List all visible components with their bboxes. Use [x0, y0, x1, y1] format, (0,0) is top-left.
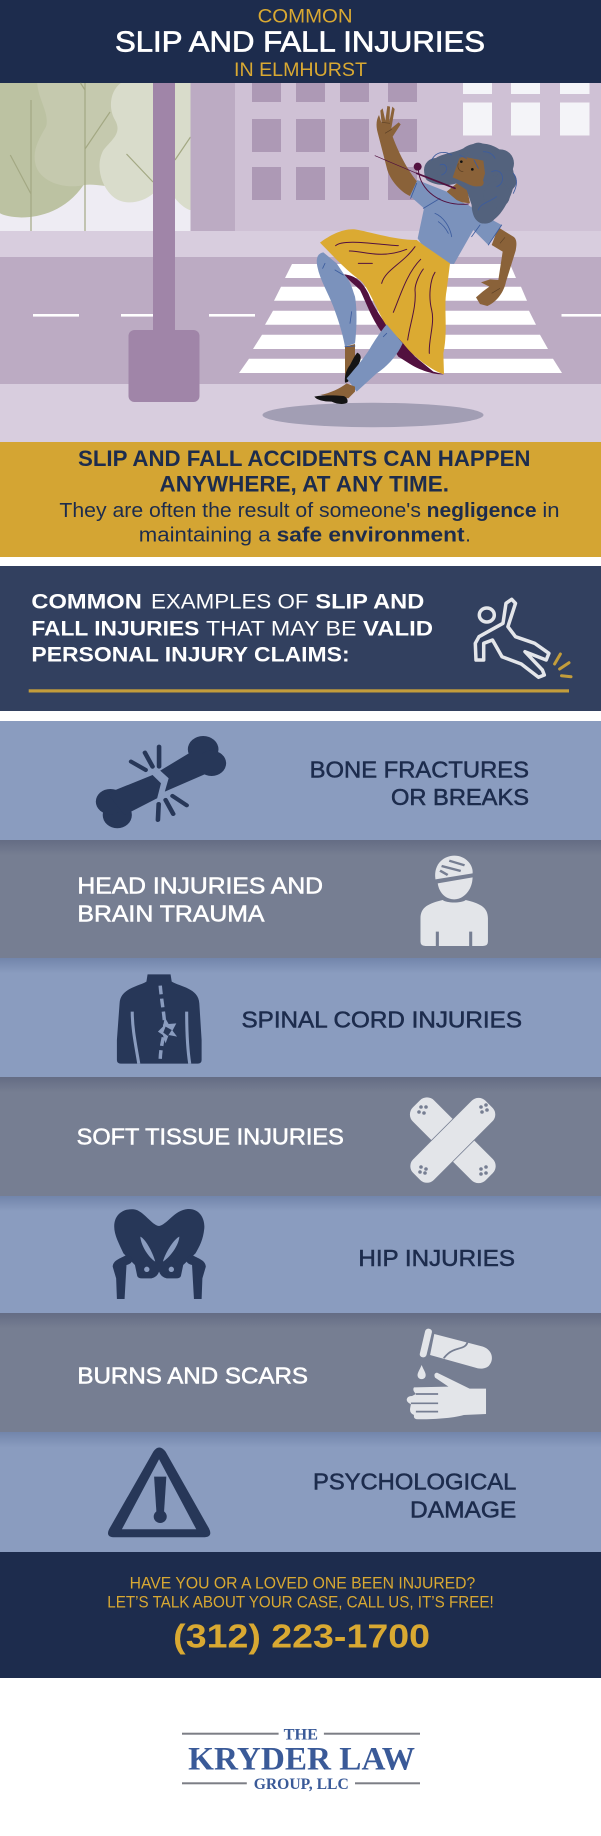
- panel heading: COMMON: [31, 590, 142, 614]
- intro text: maintaining a: [139, 525, 272, 547]
- label: [77, 872, 323, 927]
- label: BURNS AND SCARS: [77, 1362, 308, 1388]
- intro text: negligence: [427, 500, 537, 522]
- row: burns and scars: [0, 1313, 601, 1432]
- label: PSYCHOLOGICAL: [313, 1468, 516, 1494]
- shadow: [262, 403, 484, 427]
- label: [310, 757, 529, 810]
- label: [313, 1468, 516, 1523]
- cta text: [107, 1574, 494, 1612]
- icon: pelvis: [113, 1209, 206, 1299]
- logo: the kryder law group: KRYDER LAW: [188, 1741, 415, 1777]
- header banner: [0, 0, 601, 83]
- logo: the kryder law group: [182, 1726, 420, 1793]
- panel heading: VALID: [363, 616, 433, 640]
- panel heading: SLIP AND: [315, 590, 424, 614]
- label: BRAIN TRAUMA: [77, 901, 265, 927]
- gold intro panel: [0, 442, 601, 557]
- icon: bandaged head: [420, 856, 488, 946]
- panel heading: [31, 590, 433, 667]
- row: head injuries: [0, 840, 601, 958]
- title: slip and fall injuries: SLIP AND FALL INJURIES: [115, 26, 485, 58]
- row: spinal cord injuries: [0, 958, 601, 1077]
- intro text: [59, 500, 560, 547]
- row: soft tissue injuries: [0, 1077, 601, 1196]
- title: in elmhurst: IN ELMHURST: [234, 59, 367, 81]
- intro text: .: [465, 525, 471, 547]
- label: BONE FRACTURES: [310, 757, 529, 783]
- label: HEAD INJURIES AND: [77, 872, 323, 898]
- lamp post: [128, 83, 200, 402]
- call to action footer: [0, 1552, 601, 1678]
- cta text: HAVE YOU OR A LOVED ONE BEEN INJURED?: [130, 1574, 475, 1593]
- panel heading: PERSONAL INJURY CLAIMS:: [31, 643, 350, 667]
- icon: chemical burn on hand: [407, 1332, 492, 1419]
- falling woman: [314, 106, 517, 404]
- building: [190, 83, 601, 231]
- logo: the kryder law group: THE: [284, 1726, 318, 1743]
- label: DAMAGE: [410, 1497, 516, 1523]
- navy examples panel: [0, 566, 601, 711]
- row: hip injuries: [0, 1196, 601, 1313]
- logo: the kryder law group: GROUP, LLC: [254, 1776, 349, 1793]
- trees: [0, 83, 191, 217]
- hero illustration: street scene: [0, 83, 601, 442]
- icon: warning triangle: [108, 1447, 210, 1537]
- intro text: They are often the result of someone's: [59, 500, 421, 522]
- intro heading: [78, 446, 530, 497]
- icon: falling person: [475, 599, 571, 677]
- intro text: safe environment: [277, 525, 465, 547]
- phone number: (312) 223-1700: [173, 1617, 430, 1654]
- label: HIP INJURIES: [358, 1245, 515, 1271]
- label: SPINAL CORD INJURIES: [242, 1007, 522, 1033]
- icon: broken bone: [96, 736, 226, 828]
- crosswalk: [239, 264, 562, 373]
- sky: [0, 83, 191, 231]
- row: psychological damage: [0, 1432, 601, 1552]
- label: OR BREAKS: [391, 784, 529, 810]
- intro text: in: [542, 500, 560, 522]
- label: SOFT TISSUE INJURIES: [77, 1123, 344, 1149]
- title: common: COMMON: [258, 6, 353, 28]
- panel heading: THAT MAY BE: [206, 616, 356, 640]
- row: bone fractures: [0, 721, 601, 840]
- panel heading: FALL INJURIES: [31, 616, 199, 640]
- road: [0, 231, 601, 384]
- cta text: LET’S TALK ABOUT YOUR CASE, CALL US, IT’S FREE!: [107, 1593, 494, 1612]
- icon: crossed bandages: [406, 1093, 500, 1187]
- icon: injured spine: [117, 974, 202, 1064]
- panel heading: EXAMPLES OF: [151, 590, 308, 614]
- intro heading: SLIP AND FALL ACCIDENTS CAN HAPPEN: [78, 446, 530, 471]
- intro heading: ANYWHERE, AT ANY TIME.: [160, 472, 449, 497]
